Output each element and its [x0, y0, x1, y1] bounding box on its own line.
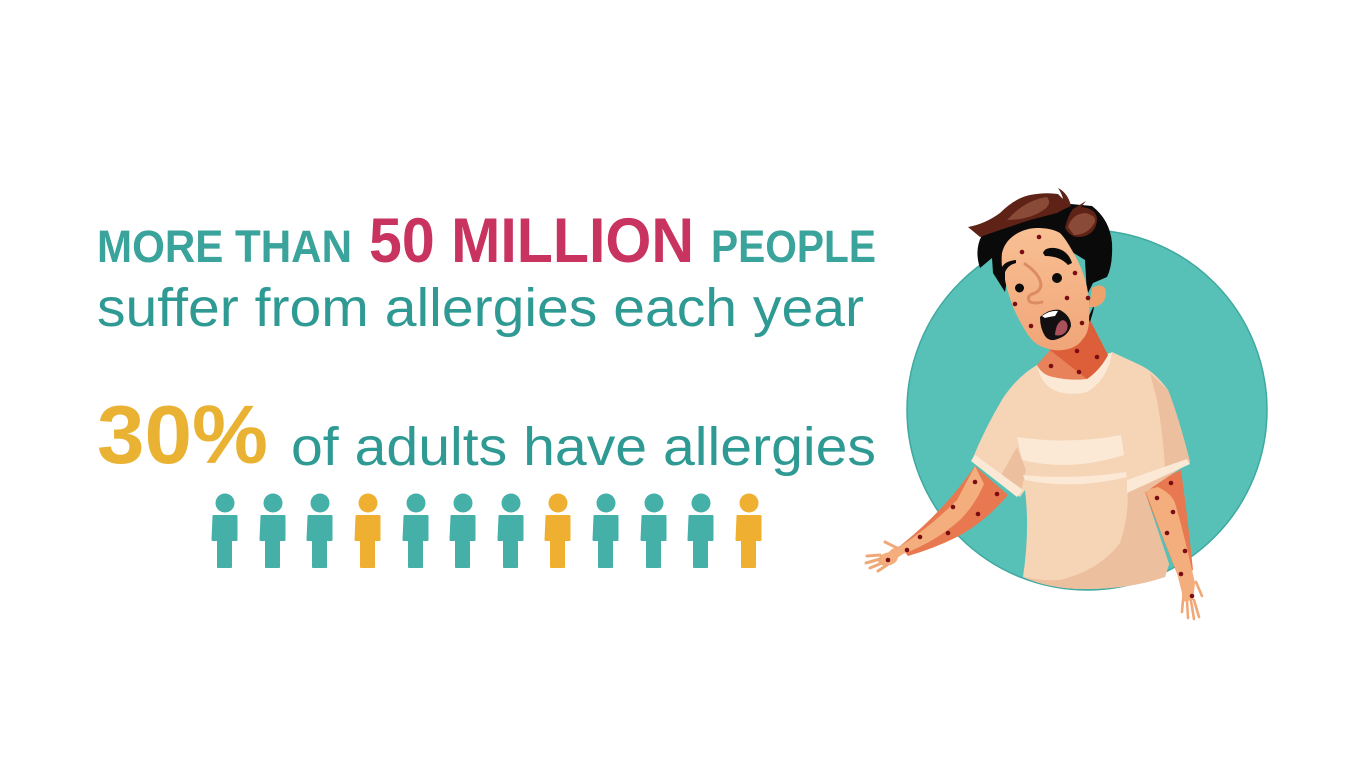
- face: [1002, 228, 1089, 350]
- statistic: 30 percent: 30%: [97, 388, 268, 481]
- hair top lock: [968, 188, 1071, 237]
- eyes: [1015, 273, 1062, 292]
- teal circle background: [907, 230, 1267, 590]
- hair second lock: [1065, 201, 1097, 237]
- subheading: suffer from allergies each year: suffer from allergies each year: [97, 278, 864, 338]
- headline: more than 50 million people: MORE THAN: [97, 221, 352, 272]
- eyebrows: [1001, 248, 1072, 282]
- hair highlights: [1007, 197, 1095, 235]
- rash spots: [886, 235, 1194, 598]
- headline: more than 50 million people: 50 MILLION: [369, 206, 694, 276]
- t-shirt: [971, 352, 1190, 589]
- pictogram row: people: [212, 494, 762, 568]
- headline: more than 50 million people: [97, 206, 876, 276]
- hair back: [977, 203, 1112, 295]
- left arm: [866, 466, 1008, 571]
- ear: [1089, 286, 1106, 307]
- collar: [1037, 353, 1112, 394]
- mouth: [1040, 310, 1071, 340]
- right arm: [1143, 470, 1202, 619]
- illustration: man with rash: [866, 188, 1202, 619]
- headline: more than 50 million people: PEOPLE: [711, 221, 876, 272]
- neck: [1037, 320, 1108, 380]
- nose: [1025, 264, 1042, 303]
- statistic label: of adults have allergies: of adults have allergies: [291, 417, 876, 477]
